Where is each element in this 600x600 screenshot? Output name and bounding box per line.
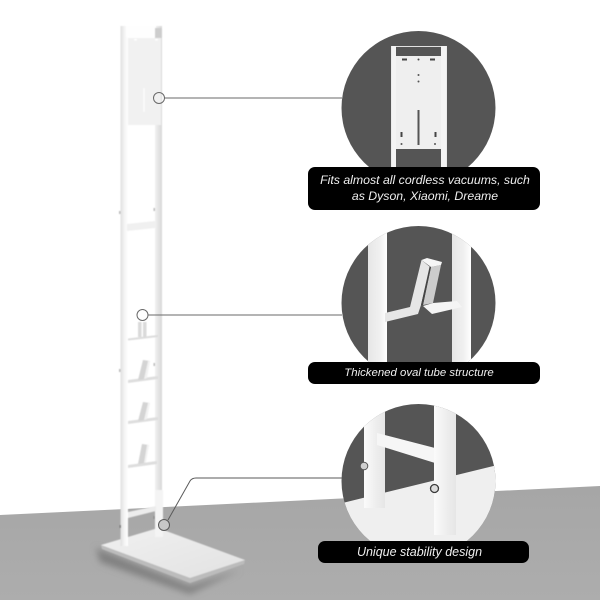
- white base surface: [344, 466, 496, 541]
- caption: compatibility: [308, 167, 540, 210]
- right post: [155, 26, 162, 537]
- right post lower part: [155, 490, 163, 537]
- detail circle: oval tube hook: [342, 226, 496, 362]
- bolt left: [360, 462, 368, 470]
- hook 1: [128, 322, 158, 340]
- caption: tube structure: [308, 362, 540, 384]
- caption: tube structure: Thickened oval tube structure: [344, 367, 494, 379]
- caption: stability: Unique stability design: [357, 545, 482, 559]
- crossbar: [377, 433, 435, 463]
- hook 2: [128, 360, 158, 383]
- callout line 2: [137, 310, 342, 320]
- detail circle: base joint: [342, 404, 496, 541]
- product: floor stand: [101, 26, 245, 583]
- caption: compatibility: as Dyson, Xiaomi, Dreame: [352, 188, 498, 202]
- plate with rails: [391, 46, 447, 167]
- floor shadow: [96, 548, 240, 594]
- upper crossbar: [127, 221, 155, 231]
- lower crossbar: [128, 506, 156, 518]
- top frame: [126, 26, 156, 37]
- caption: stability: [318, 541, 529, 563]
- right tube: [434, 400, 456, 535]
- mounting plate: [128, 38, 161, 125]
- detail circle: mounting plate: [342, 31, 496, 167]
- stand base: [101, 528, 245, 583]
- left tube: [364, 412, 385, 508]
- hook 3: [128, 402, 158, 424]
- bolt right: [430, 484, 438, 492]
- post joints: [119, 211, 120, 214]
- right tube: [452, 234, 471, 362]
- hook: [385, 258, 462, 322]
- caption: compatibility: Fits almost all cordless vacuums, such: [320, 173, 530, 187]
- callout line 3: [158, 478, 342, 530]
- floor: [0, 486, 600, 600]
- left tube: [368, 233, 387, 362]
- hook 4: [128, 444, 157, 468]
- callout line 1: [154, 92, 342, 104]
- left post: [120, 26, 128, 546]
